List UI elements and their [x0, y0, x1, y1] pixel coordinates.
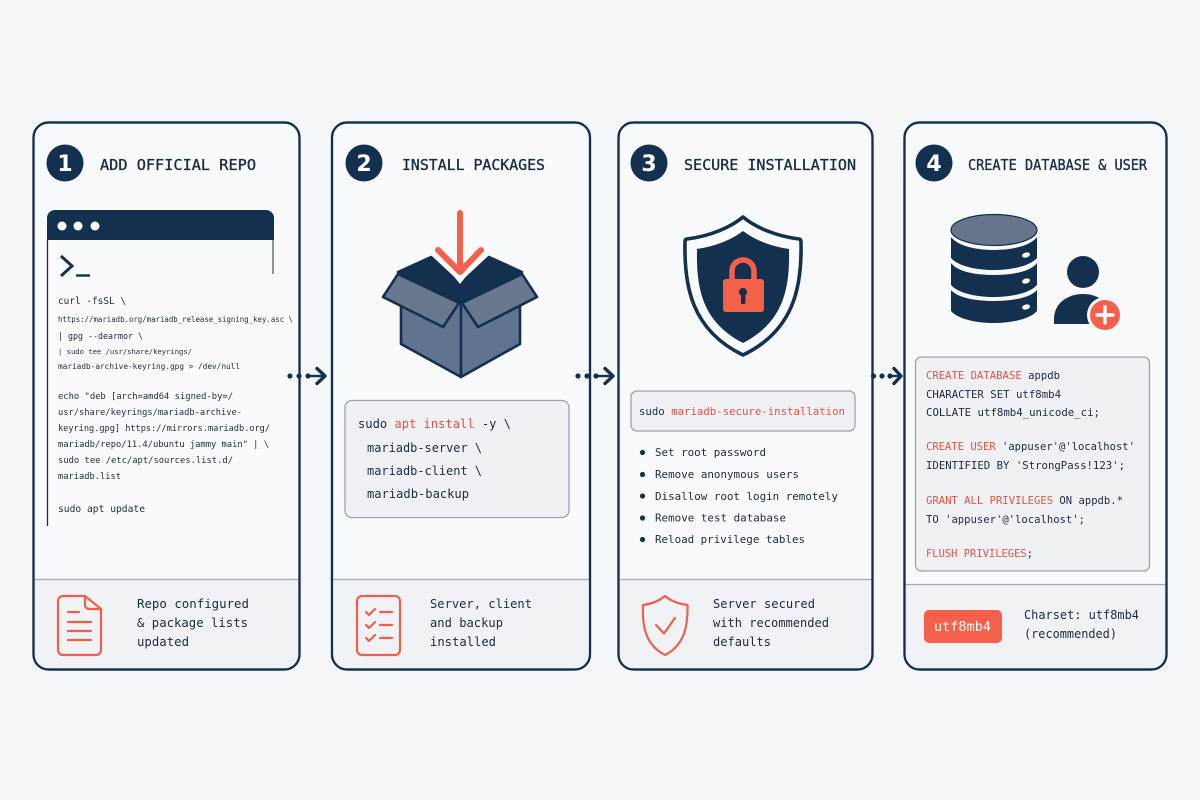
terminal commands: sudo tee /etc/apt/sources.list.d/ — [58, 456, 233, 466]
step number 3 — [630, 144, 668, 182]
heading: install packages: INSTALL PACKAGES — [402, 156, 545, 174]
terminal commands: echo "deb [arch=amd64 signed-by=/ — [58, 392, 233, 402]
code box: apt install: mariadb-backup — [367, 487, 469, 501]
terminal commands: mariadb-archive-keyring.gpg > /dev/null — [58, 362, 240, 371]
code box: SQL statements — [916, 357, 1150, 571]
footer text: server secured — [713, 597, 829, 649]
code box: SQL statements: TO 'appuser'@'localhost'; — [926, 514, 1085, 526]
panel: step 2 install packages — [332, 122, 590, 670]
code box: apt install: sudo apt install -y \ — [358, 416, 511, 431]
heading: create database and user: CREATE DATABASE & USER — [968, 156, 1148, 174]
icon: open box with download arrow — [383, 213, 537, 377]
checklist: hardening steps: Remove test database — [655, 512, 786, 524]
code box: apt install: mariadb-client \ — [367, 464, 482, 478]
footer text: repo configured: updated — [137, 635, 189, 649]
step number 4: 4 — [926, 152, 942, 177]
footer text: charset: Charset: utf8mb4 — [1024, 608, 1139, 622]
footer text: repo configured: Repo configured — [137, 597, 249, 611]
footer text: charset — [1024, 608, 1139, 641]
code box: SQL statements: CREATE DATABASE appdb — [926, 370, 1060, 382]
terminal commands: https://mariadb.org/mariadb_release_signing_key.asc \ — [58, 315, 293, 324]
footer text: server client backup — [430, 597, 532, 649]
step number 1: 1 — [57, 152, 73, 177]
terminal commands: | sudo tee /usr/share/keyrings/ — [58, 347, 192, 356]
code box: SQL statements: CHARACTER SET utf8mb4 — [926, 389, 1061, 401]
arrow: step 1 to step 2 — [287, 368, 325, 384]
panel: step 1 add official repo — [34, 122, 300, 670]
footer text: repo configured: & package lists — [137, 616, 248, 630]
terminal commands: keyring.gpg] https://mirrors.mariadb.org/ — [58, 424, 270, 434]
step number 2: 2 — [356, 152, 372, 177]
code box: SQL statements: COLLATE utf8mb4_unicode_ci; — [926, 407, 1100, 419]
code box: SQL statements: IDENTIFIED BY 'StrongPass!123'; — [926, 460, 1125, 472]
icon: checklist — [357, 596, 400, 655]
terminal commands: usr/share/keyrings/mariadb-archive- — [58, 408, 242, 418]
checklist: hardening steps — [640, 446, 838, 546]
badge: utf8mb4 — [924, 610, 1002, 643]
arrow: step 2 to step 3 — [575, 368, 613, 384]
terminal window — [47, 210, 274, 526]
code box: secure installation command: sudo mariadb-secure-installation — [639, 405, 845, 418]
step number 3: 3 — [641, 152, 657, 177]
code box: apt install — [345, 400, 569, 518]
heading: add official repo: ADD OFFICIAL REPO — [100, 156, 256, 174]
panel: step 3 secure installation — [618, 122, 872, 670]
footer text: server client backup: Server, client — [430, 597, 532, 611]
checklist: hardening steps: Disallow root login remotely — [655, 490, 838, 503]
checklist: hardening steps: Remove anonymous users — [655, 468, 799, 481]
footer text: server secured: with recommended — [713, 616, 829, 630]
terminal commands: curl -fsSL \ — [58, 296, 126, 307]
icon: shield with check — [643, 596, 688, 655]
arrow: step 3 to step 4 — [871, 368, 901, 384]
terminal commands: mariadb.list — [58, 472, 121, 482]
step number 2 — [346, 144, 382, 182]
badge: utf8mb4: utf8mb4 — [934, 619, 991, 635]
icon: database cylinder — [951, 214, 1037, 323]
footer text: server client backup: installed — [430, 635, 496, 649]
step number 1 — [46, 144, 84, 182]
footer text: charset: (recommended) — [1024, 627, 1117, 641]
icon: shield with padlock — [685, 217, 801, 355]
icon: document — [58, 596, 101, 655]
panel: step 4 create database and user — [904, 122, 1166, 670]
code box: SQL statements: CREATE USER 'appuser'@'localhost' — [926, 441, 1135, 453]
terminal commands: | gpg --dearmor \ — [58, 332, 143, 342]
footer text: server secured: Server secured — [713, 597, 815, 611]
checklist: hardening steps: Reload privilege tables — [655, 533, 805, 546]
terminal commands — [58, 296, 293, 515]
code box: SQL statements: GRANT ALL PRIVILEGES ON appdb.* — [926, 495, 1123, 507]
step number 4 — [916, 144, 952, 182]
terminal commands: sudo apt update — [58, 504, 145, 515]
code box: SQL statements: FLUSH PRIVILEGES; — [926, 548, 1033, 560]
checklist: hardening steps: Set root password — [655, 446, 766, 459]
terminal commands: mariadb/repo/11.4/ubuntu jammy main" | \ — [58, 440, 269, 450]
code box: secure installation command — [631, 391, 855, 431]
heading: secure installation: SECURE INSTALLATION — [684, 156, 856, 174]
footer text: server client backup: and backup — [430, 616, 503, 630]
footer text: repo configured — [137, 597, 249, 649]
icon: user with plus badge — [1054, 256, 1123, 333]
code box: apt install: mariadb-server \ — [367, 441, 482, 455]
footer text: server secured: defaults — [713, 635, 771, 649]
